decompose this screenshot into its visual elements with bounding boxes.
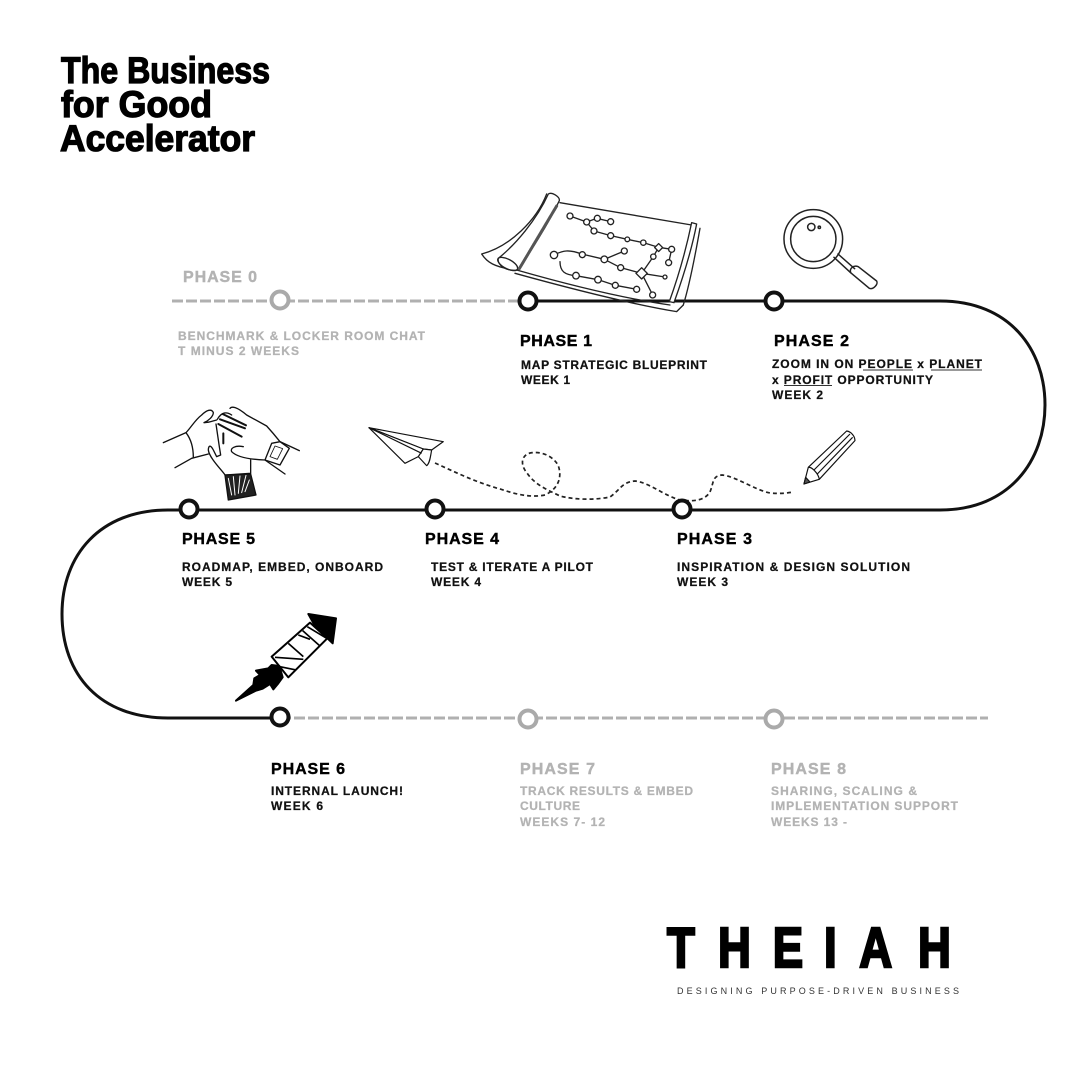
phase 2 text: WEEK 2 [772,388,823,402]
icon: magnifying glass [784,210,877,289]
phase 5 text: WEEK 5 [182,575,232,589]
phase 1 text: PHASE 1 [520,333,592,350]
phase 7 text: TRACK RESULTS & EMBED [520,784,693,798]
phase 1 text: MAP STRATEGIC BLUEPRINT [521,358,708,372]
icon: high-five hands [163,407,299,500]
phase 5 text: ROADMAP, EMBED, ONBOARD [182,560,383,574]
phase 2 text: ZOOM IN ON PEOPLE x PLANET [772,357,983,371]
phase 2 text: PHASE 2 [774,333,849,350]
phase 8 text: PHASE 8 [771,761,846,778]
phase 0 text: BENCHMARK & LOCKER ROOM CHAT [178,329,426,343]
phase node markers [180,292,782,728]
dashed flight trail [435,452,793,501]
phase 1 text [520,333,708,387]
phase 5 text [182,531,383,589]
phase 6 text: WEEK 6 [271,799,323,813]
phase 2 text: x PROFIT OPPORTUNITY [772,373,933,387]
phase 8 text [771,761,959,829]
phase 4 text: PHASE 4 [425,531,499,548]
phase 7 text [520,761,693,829]
phase 1 text: WEEK 1 [521,373,570,387]
timeline path [62,301,1045,718]
phase 6 text: PHASE 6 [271,761,345,778]
phase 8 text: IMPLEMENTATION SUPPORT [771,799,959,813]
icon: paper plane [369,428,443,466]
phase 7 text: CULTURE [520,799,580,813]
phase 8 text: SHARING, SCALING & [771,784,917,798]
title: Accelerator [60,118,255,159]
phase 2 text [772,333,983,402]
phase 8 text: WEEKS 13 - [771,815,847,829]
phase 0 text [178,269,426,358]
title: The Business [61,50,270,91]
phase 7 text: WEEKS 7- 12 [520,815,605,829]
phase 4 text: WEEK 4 [431,575,481,589]
phase 3 text [677,531,910,589]
phase 4 text [425,531,594,589]
icon: pencil [804,431,855,484]
phase 3 text: PHASE 3 [677,531,752,548]
title: for Good [61,84,212,125]
phase 6 text [271,761,403,813]
icon: map [482,193,700,312]
logo: THEIAH: DESIGNING PURPOSE-DRIVEN BUSINESS [677,986,959,996]
phase 0 text: PHASE 0 [183,269,257,286]
phase 4 text: TEST & ITERATE A PILOT [431,560,594,574]
phase 3 text: INSPIRATION & DESIGN SOLUTION [677,560,910,574]
phase 3 text: WEEK 3 [677,575,728,589]
icon: firework rocket [236,614,336,701]
phase 0 text: T MINUS 2 WEEKS [178,344,299,358]
phase 7 text: PHASE 7 [520,761,595,778]
title [60,50,270,159]
logo: THEIAH: THEIAH [667,915,951,979]
phase 6 text: INTERNAL LAUNCH! [271,784,403,798]
phase 5 text: PHASE 5 [182,531,255,548]
